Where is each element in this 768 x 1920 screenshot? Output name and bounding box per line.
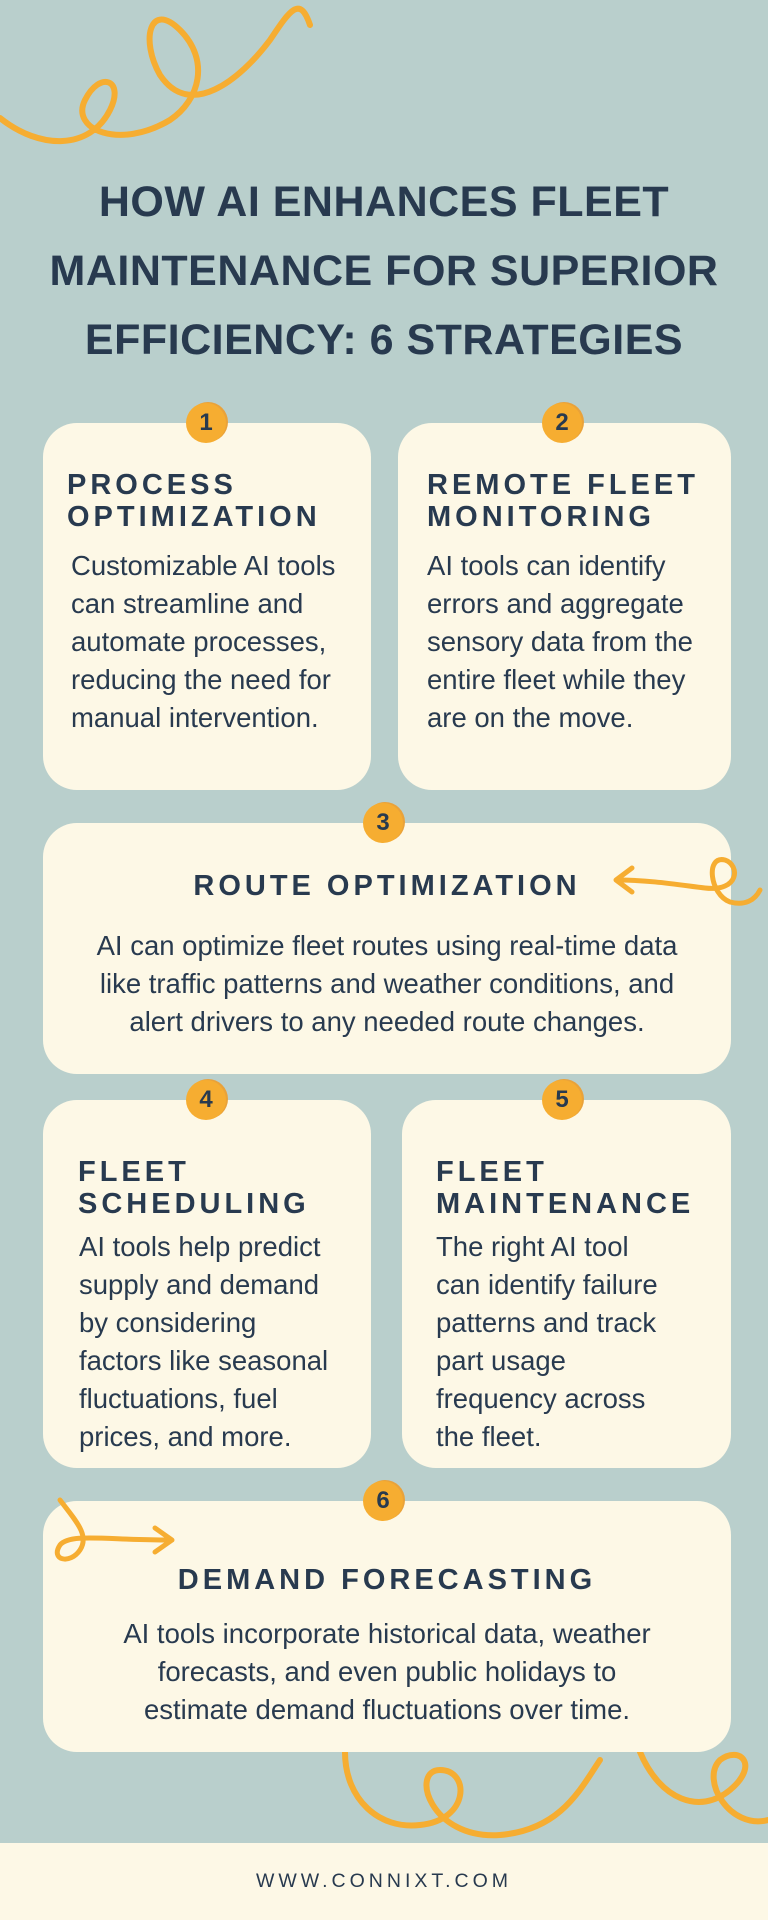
panel: fleet maintenance: the fleet. — [436, 1421, 542, 1452]
badge 6 — [363, 1481, 403, 1521]
bottom swirls — [345, 1752, 600, 1835]
arrow: demand — [54, 1498, 174, 1562]
panel: fleet scheduling: fluctuations, fuel — [79, 1383, 278, 1414]
panel: demand forecasting — [43, 1501, 731, 1752]
panel: process optimization: reducing the need for — [71, 664, 331, 695]
panel: remote fleet monitoring: AI tools can identify — [427, 550, 665, 581]
panel: process optimization: PROCESS — [67, 469, 237, 501]
panel: process optimization: OPTIMIZATION — [67, 501, 321, 533]
title: HOW AI ENHANCES FLEET — [99, 178, 669, 226]
panel: route optimization: alert drivers to any needed route changes. — [129, 1006, 645, 1037]
panel: fleet maintenance — [402, 1100, 731, 1468]
panel: fleet scheduling: prices, and more. — [79, 1421, 291, 1452]
badge 2 — [542, 403, 582, 443]
panel: demand forecasting: forecasts, and even public holidays to — [158, 1656, 616, 1687]
panel: process optimization: manual intervention. — [71, 702, 319, 733]
footer: WWW.CONNIXT.COM — [256, 1870, 512, 1892]
badge 4 — [186, 1080, 226, 1120]
badge 4: 4 — [199, 1086, 213, 1113]
badge 3: 3 — [376, 809, 390, 836]
title: MAINTENANCE FOR SUPERIOR — [50, 247, 718, 295]
panel: route optimization: ROUTE OPTIMIZATION — [193, 870, 581, 902]
panel: demand forecasting: estimate demand fluctuations over time. — [144, 1694, 630, 1725]
panel: route optimization: AI can optimize fleet routes using real-time data — [97, 930, 677, 961]
title — [50, 178, 718, 364]
panel: fleet scheduling: supply and demand — [79, 1269, 319, 1300]
badge 5: 5 — [555, 1086, 569, 1113]
panel: process optimization — [43, 423, 371, 790]
badge 1: 1 — [199, 409, 213, 436]
panel: fleet maintenance: MAINTENANCE — [436, 1188, 694, 1220]
badge 3 — [363, 803, 403, 843]
panel: fleet maintenance: FLEET — [436, 1156, 548, 1188]
panel: fleet scheduling — [43, 1100, 371, 1468]
panel: remote fleet monitoring: MONITORING — [427, 501, 655, 533]
panel: remote fleet monitoring — [398, 423, 731, 790]
panel: remote fleet monitoring: errors and aggregate — [427, 588, 684, 619]
title: EFFICIENCY: 6 STRATEGIES — [85, 316, 683, 364]
badge 5 — [542, 1080, 582, 1120]
panel: fleet maintenance: patterns and track — [436, 1307, 656, 1338]
panel: demand forecasting: DEMAND FORECASTING — [178, 1564, 596, 1596]
panel: process optimization: Customizable AI tools — [71, 550, 335, 581]
badge 1 — [186, 403, 226, 443]
panel: fleet scheduling: AI tools help predict — [79, 1231, 321, 1262]
footer — [0, 1843, 768, 1920]
panel: fleet maintenance: The right AI tool — [436, 1231, 629, 1262]
panel: route optimization: like traffic patterns and weather conditions, and — [100, 968, 674, 999]
panel: fleet maintenance: part usage — [436, 1345, 566, 1376]
panel: process optimization: can streamline and — [71, 588, 303, 619]
panel: fleet scheduling: factors like seasonal — [79, 1345, 328, 1376]
badge 6: 6 — [376, 1487, 390, 1514]
panel: process optimization: automate processes, — [71, 626, 326, 657]
badge 2: 2 — [555, 409, 569, 436]
panel: route optimization — [43, 823, 731, 1074]
panel: remote fleet monitoring: sensory data from the — [427, 626, 693, 657]
arrow: route — [614, 857, 762, 906]
panel: fleet maintenance: frequency across — [436, 1383, 645, 1414]
panel: fleet scheduling: SCHEDULING — [78, 1188, 310, 1220]
panel: demand forecasting: AI tools incorporate historical data, weather — [123, 1618, 651, 1649]
panel: fleet scheduling: FLEET — [78, 1156, 190, 1188]
panel: remote fleet monitoring: are on the move. — [427, 702, 633, 733]
panel: remote fleet monitoring: entire fleet while they — [427, 664, 685, 695]
panel: fleet maintenance: can identify failure — [436, 1269, 658, 1300]
panel: remote fleet monitoring: REMOTE FLEET — [427, 469, 699, 501]
panel: fleet scheduling: by considering — [79, 1307, 256, 1338]
